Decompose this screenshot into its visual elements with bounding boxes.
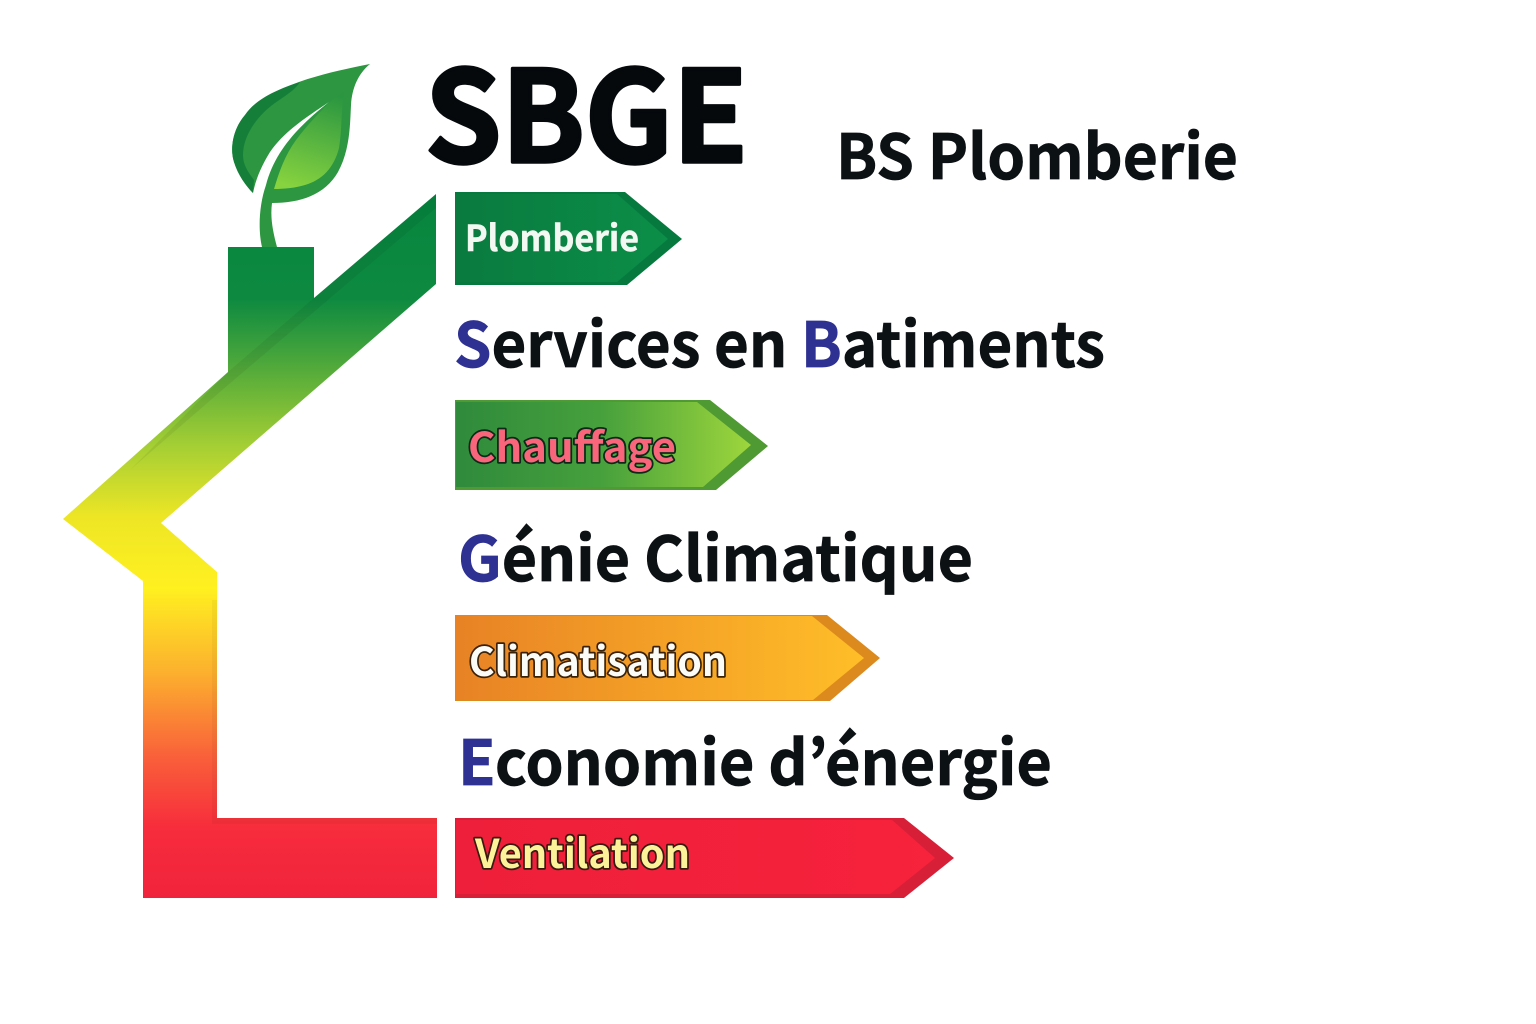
title: SBGE: SBGE: [425, 17, 748, 199]
heading: BS Plomberie: BS Plomberie: [836, 107, 1238, 197]
arrow: Plomberie: [455, 192, 682, 285]
arrow: Climatisation: Climatisation: [469, 630, 727, 688]
house outline with energy gradient: [63, 194, 437, 898]
icon: green leaf: [232, 64, 370, 247]
arrow: Ventilation: Ventilation: [474, 822, 690, 880]
arrow: Climatisation: [455, 615, 880, 701]
text line: Génie Climatique: Génie Climatique: [458, 509, 973, 599]
arrow: Chauffage: [455, 400, 768, 490]
arrow: Ventilation: [455, 818, 954, 898]
text line: Services en Batiments: Services en Batiments: [454, 295, 1105, 385]
text line: Economie d'énergie: Economie d’énergie: [458, 713, 1052, 803]
arrow: Chauffage: Chauffage: [468, 414, 676, 474]
arrow: Plomberie: Plomberie: [465, 210, 639, 262]
